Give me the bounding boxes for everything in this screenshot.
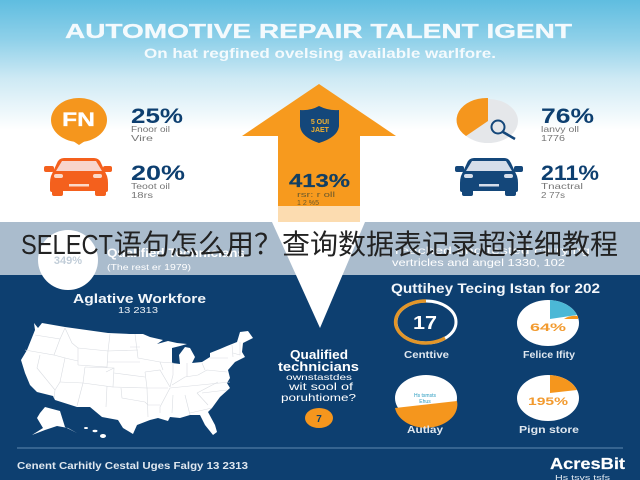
- icon: orange FN speech bubble: FN: [62, 110, 95, 131]
- arrow: central orange up arrow: [242, 84, 396, 222]
- chart: pie 195%: [517, 375, 580, 436]
- icon: shield badge: 5 OUI: [311, 119, 329, 126]
- heading: workforce map: [73, 291, 206, 315]
- callout: qualified technicians: technicians: [278, 360, 359, 374]
- footer: logo: [550, 456, 626, 480]
- callout: qualified technicians: [278, 348, 359, 428]
- callout: qualified technicians: 7: [316, 414, 322, 425]
- chart: pie 64%: [517, 300, 579, 361]
- banner: headline text: 语句怎么用？查询数据表记录超详细教程: [114, 223, 618, 263]
- chart: pie 195%: 195%: [528, 396, 568, 408]
- chart: ring 17: [396, 301, 456, 361]
- chart: pie half orange: [395, 375, 457, 436]
- stat: 76%: lanvy oll: [541, 124, 579, 134]
- banner: headline text: SELECT: [21, 229, 113, 260]
- stat: 413%: rsr: r oll: [297, 192, 336, 199]
- text: vehicles note: reached and tested carrying: [395, 246, 590, 257]
- stat: 76%: 1776: [541, 133, 565, 143]
- heading: workforce map: Aglative Workfore: [73, 291, 206, 306]
- stat: 349% qualified technicians: (The rest er 1979): [107, 262, 191, 272]
- stat: 76%: 76%: [541, 105, 594, 128]
- callout: qualified technicians: Qualified: [290, 348, 348, 362]
- chart: pie half orange: Ehus: [419, 399, 431, 405]
- stat: 25%: Fnoor oil: [131, 124, 170, 134]
- icon: shield badge: [300, 106, 339, 143]
- background: sky gradient header: [0, 0, 640, 130]
- icon: shield badge: JAET: [311, 127, 330, 134]
- chart: ring 17: 17: [413, 313, 437, 333]
- heading: right panel: Quttihey Tecing Istan for 202: [391, 281, 600, 296]
- stat: 20%: [131, 162, 185, 200]
- map: United States: [21, 323, 253, 438]
- banner: translucent overlay: [0, 206, 640, 275]
- stat: 20%: 18rs: [131, 190, 153, 200]
- stat: 413%: [289, 171, 350, 207]
- stat: 211%: 2 77s: [541, 190, 565, 200]
- stat: 25%: 25%: [131, 105, 183, 128]
- chart: pie half orange: Hs tsmsts: [414, 393, 436, 399]
- callout: qualified technicians: ownstastdes: [286, 372, 352, 382]
- chart: pie 64%: 64%: [530, 322, 566, 334]
- icon: orange car: [44, 158, 112, 196]
- stat: 349% qualified technicians: [38, 230, 245, 290]
- stat: 211%: 211%: [541, 162, 599, 185]
- heading: workforce map: 13 2313: [118, 305, 158, 315]
- stat: 413%: 413%: [289, 171, 350, 191]
- stat: 211%: [541, 162, 599, 200]
- stat: 413%: 1 2 %5: [297, 200, 319, 207]
- title: AUTOMOTIVE REPAIR TALENT IGENT: [65, 20, 573, 43]
- icon: navy car: [455, 158, 523, 196]
- stat: 76%: [541, 105, 594, 143]
- footer: source note: Cenent Carhitly Cestal Uges Falgy 13 2313: [17, 461, 248, 472]
- stat: 349% qualified technicians: 349%: [54, 255, 82, 267]
- chart: ring 17: Centtive: [404, 350, 450, 361]
- callout: qualified technicians: wit sool of: [288, 382, 353, 393]
- chart: pie 64%: Felice Ifity: [523, 350, 575, 361]
- icon: pie with magnifier: [457, 98, 518, 143]
- stat: 211%: Tnactral: [541, 181, 583, 191]
- text: vehicles note: [392, 246, 590, 269]
- chart: pie half orange: Autlay: [407, 425, 444, 436]
- stat: 20%: Teoot oil: [131, 181, 170, 191]
- chart: pie 195%: Pign store: [519, 425, 580, 436]
- icon: orange FN speech bubble: [51, 98, 107, 145]
- callout: qualified technicians: poruhtiome?: [281, 392, 356, 404]
- subtitle: On hat regfined ovelsing available warlfore.: [144, 45, 496, 61]
- footer: logo: AcresBit: [550, 456, 626, 473]
- stat: 20%: 20%: [131, 162, 185, 185]
- stat: 349% qualified technicians: Qualified Technicians: [107, 246, 245, 260]
- stat: 25%: Vire: [131, 133, 153, 143]
- stat: 25%: [131, 105, 183, 143]
- panel: navy lower section: [0, 222, 640, 480]
- text: vehicles note: vertricles and angel 1330, 102: [392, 258, 566, 269]
